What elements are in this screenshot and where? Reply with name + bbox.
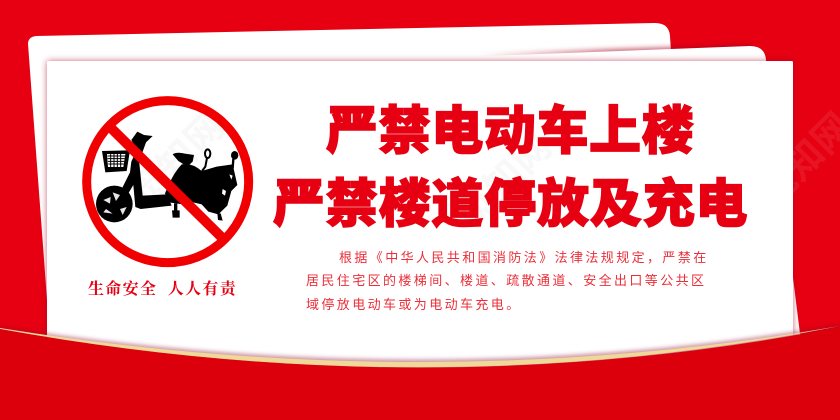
- main white panel: [47, 61, 793, 371]
- stand: [172, 203, 180, 218]
- body paragraph: 域停放电动车或为电动车充电。: [306, 297, 522, 312]
- rear body: [165, 164, 237, 214]
- icon: red prohibition ring and slash: [87, 101, 249, 263]
- body paragraph: 根据《中华人民共和国消防法》法律法规规定，严禁在: [339, 250, 709, 265]
- main title: [272, 102, 748, 234]
- middle paper sheet: [355, 46, 802, 350]
- title line 2: 严禁楼道停放及充电: [273, 176, 748, 234]
- front wheel: [96, 186, 133, 222]
- seat: [173, 153, 194, 167]
- watermark text: 觅知网: [123, 106, 233, 216]
- basket: [102, 150, 130, 172]
- body paragraph: [306, 250, 709, 312]
- main panel shadow: [47, 61, 793, 371]
- mirrors: [205, 149, 210, 158]
- middle paper shadow: [355, 44, 766, 120]
- slogan under sign: 生命安全 人人有责: [88, 281, 237, 298]
- title line 1: 严禁电动车上楼: [326, 103, 694, 161]
- gold curved stripe: [0, 326, 840, 367]
- text: 觅知网: [450, 126, 560, 236]
- handlebar and front shield: [122, 132, 172, 209]
- icon: electric scooter silhouette: [96, 132, 238, 222]
- curve shadow: [0, 325, 840, 420]
- bottom red band: [0, 327, 840, 420]
- body paragraph: 居民住宅区的楼梯间、楼道、疏散通道、安全出口等公共区: [306, 273, 706, 288]
- back paper sheet: [28, 23, 690, 340]
